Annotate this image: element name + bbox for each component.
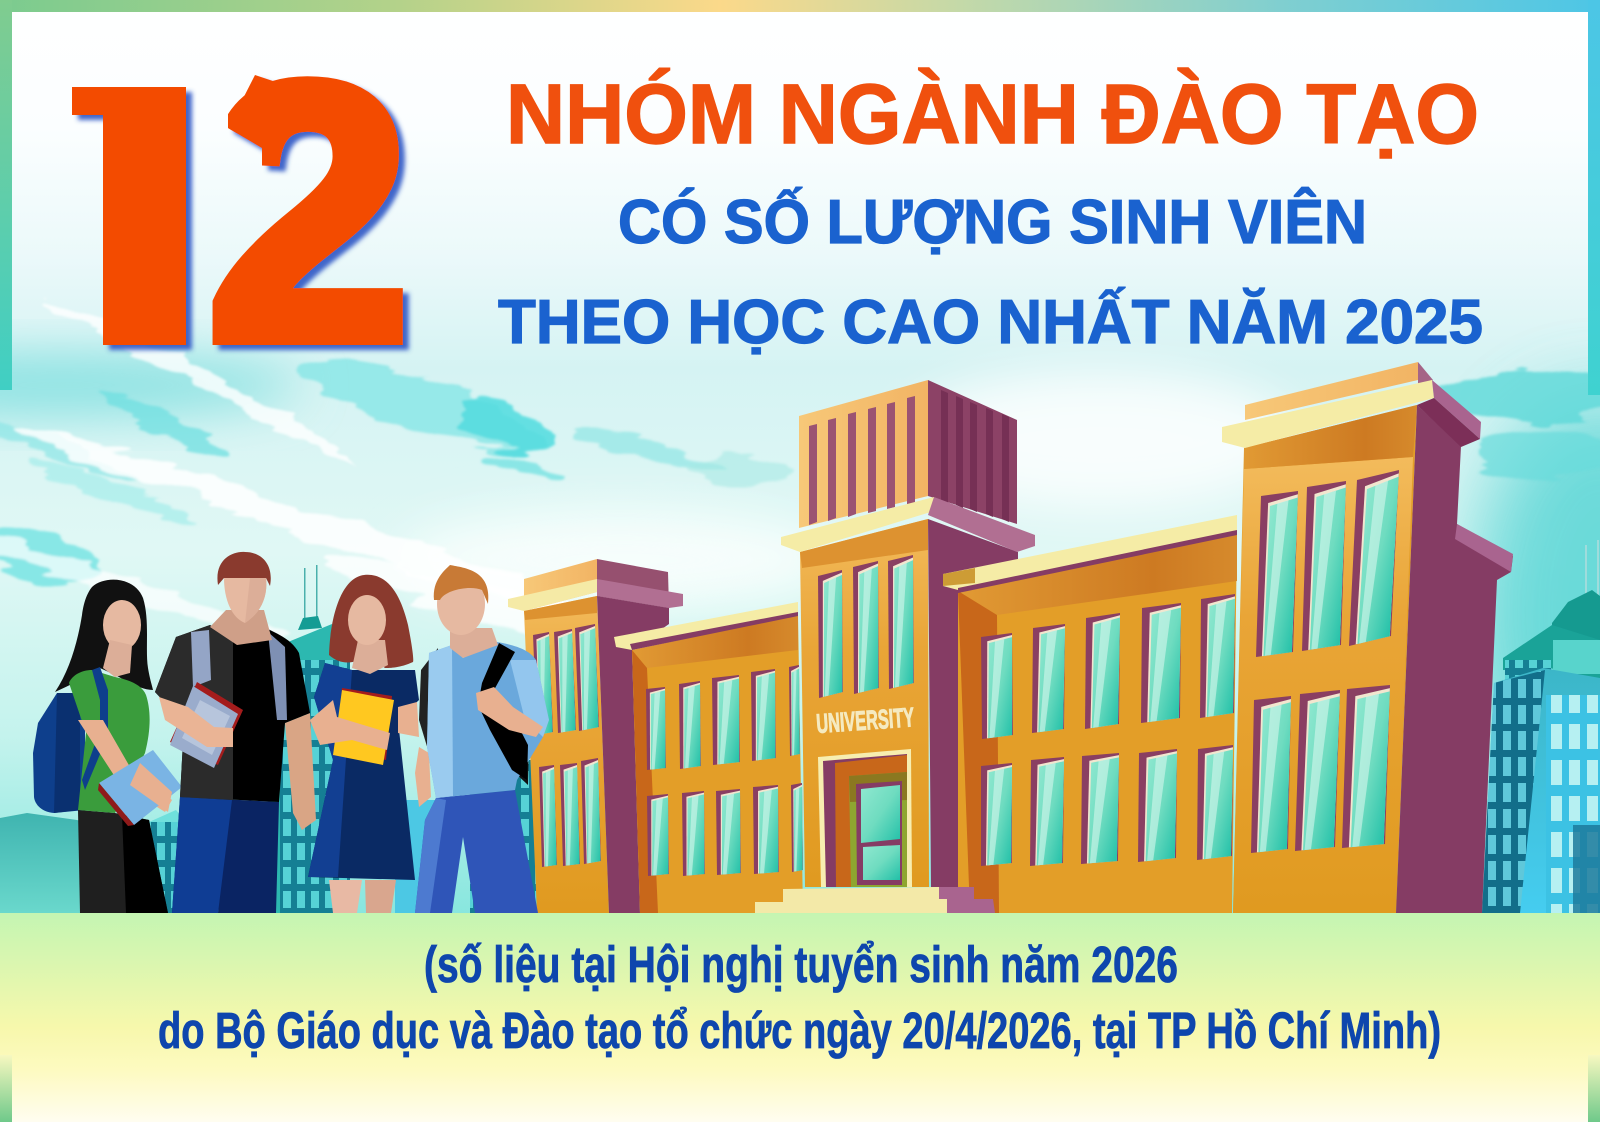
right wing [943,515,1237,913]
left wing [614,602,803,913]
background building: left teal tower [149,565,540,913]
title line 2: CÓ SỐ LƯỢNG SINH VIÊN [618,188,1367,257]
frame: gradient border [0,0,1600,395]
caption text: (số liệu tại Hội nghị tuyển sinh năm 2026 [424,936,1178,993]
central tower [781,380,1035,887]
building sign: UNIVERSITY: UNIVERSITY [815,702,915,739]
student 2: boy in black shirt [155,552,316,913]
right tower [1222,362,1513,913]
entrance door [818,749,912,887]
left tower [508,559,683,913]
illustration: university building [508,362,1513,913]
title [498,67,1483,357]
background building: right teal tower [1482,540,1600,913]
distant hill [0,813,150,913]
title line 3: THEO HỌC CAO NHẤT NĂM 2025 [498,288,1483,357]
title line 1: NHÓM NGÀNH ĐÀO TẠO [506,67,1479,161]
student 1: girl in green shirt [33,580,182,913]
student 4: boy in light blue shirt [415,565,549,913]
student 3: girl in navy dress [308,575,419,913]
big number 12 [72,75,412,354]
big number 12: 2 [208,9,409,414]
entrance steps [755,887,995,913]
caption text [158,936,1441,1059]
panel: caption band [0,913,1600,1122]
illustration: four students [33,552,549,913]
